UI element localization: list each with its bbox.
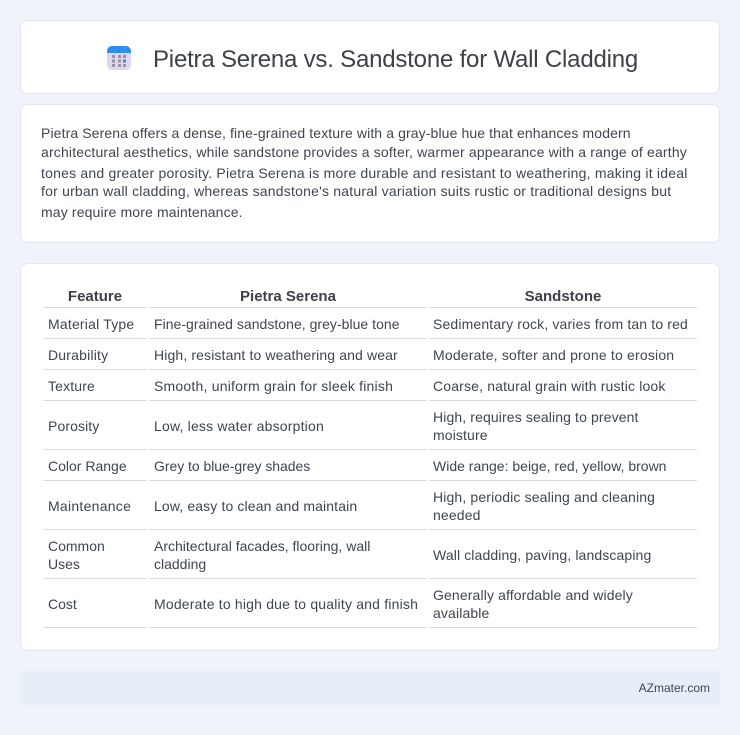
row: material type: Sedimentary rock, varies from tan to red	[433, 316, 688, 332]
summary paragraph	[41, 125, 688, 220]
row: material type: Fine-grained sandstone, grey-blue tone	[154, 316, 400, 332]
row: cost: Cost	[48, 596, 77, 612]
row: durability: Durability	[48, 347, 108, 363]
row: cost: Generally affordable and widely	[433, 587, 633, 603]
row: common uses: Wall cladding, paving, landscaping	[433, 547, 651, 563]
summary paragraph: tones and greater porosity. Pietra Serena is more durable and resistant to weathering, making it ideal	[41, 165, 688, 181]
row: maintenance: High, periodic sealing and cleaning	[433, 489, 655, 505]
row: durability: Moderate, softer and prone to erosion	[433, 347, 674, 363]
row: cost: Moderate to high due to quality and finish	[154, 596, 418, 612]
row: common uses	[48, 538, 651, 572]
row: texture: Smooth, uniform grain for sleek finish	[154, 378, 393, 394]
row: color range: Grey to blue-grey shades	[154, 458, 310, 474]
row: color range: Color Range	[48, 458, 127, 474]
panel: title card	[20, 20, 720, 94]
title: Pietra Serena vs. Sandstone for Wall Cladding	[153, 46, 638, 73]
row: porosity: High, requires sealing to prevent	[433, 409, 639, 425]
header row: Feature	[68, 288, 122, 305]
row: material type: Material Type	[48, 316, 134, 332]
row: common uses: cladding	[154, 556, 206, 572]
row: texture: Coarse, natural grain with rustic look	[433, 378, 666, 394]
panel: comparison table	[20, 263, 720, 651]
row: common uses: Common	[48, 538, 105, 554]
summary paragraph: Pietra Serena offers a dense, fine-grained texture with a gray-blue hue that enhances modern	[41, 125, 631, 141]
summary paragraph: architectural aesthetics, while sandstone provides a softer, warmer appearance with a range of earthy	[41, 144, 687, 160]
row: color range: Wide range: beige, red, yellow, brown	[433, 458, 666, 474]
row: porosity: moisture	[433, 427, 488, 443]
row: maintenance: Low, easy to clean and maintain	[154, 498, 357, 514]
row: common uses: Uses	[48, 556, 80, 572]
footer bar	[20, 671, 720, 705]
row: durability	[48, 347, 674, 363]
row: material type	[48, 316, 688, 332]
row: cost	[48, 587, 633, 621]
panel: summary text	[20, 104, 720, 243]
comparison table	[43, 288, 697, 628]
header row: Pietra Serena	[240, 288, 336, 305]
row: maintenance: needed	[433, 507, 481, 523]
row: durability: High, resistant to weathering and wear	[154, 347, 398, 363]
row: cost: available	[433, 605, 489, 621]
header row	[68, 288, 601, 305]
row: maintenance: Maintenance	[48, 498, 131, 514]
footer credit: AZmater.com	[639, 681, 710, 695]
row: porosity: Porosity	[48, 418, 99, 434]
icon: calendar	[107, 46, 131, 70]
row: color range	[48, 458, 666, 474]
row: maintenance	[48, 489, 655, 523]
row: texture	[48, 378, 666, 394]
header row: Sandstone	[525, 288, 601, 305]
row: texture: Texture	[48, 378, 95, 394]
summary paragraph: for urban wall cladding, whereas sandstone's natural variation suits rustic or traditional designs but	[41, 183, 671, 199]
summary paragraph: may require more maintenance.	[41, 204, 243, 220]
row: porosity	[48, 409, 639, 443]
row: porosity: Low, less water absorption	[154, 418, 324, 434]
row: common uses: Architectural facades, flooring, wall	[154, 538, 370, 554]
